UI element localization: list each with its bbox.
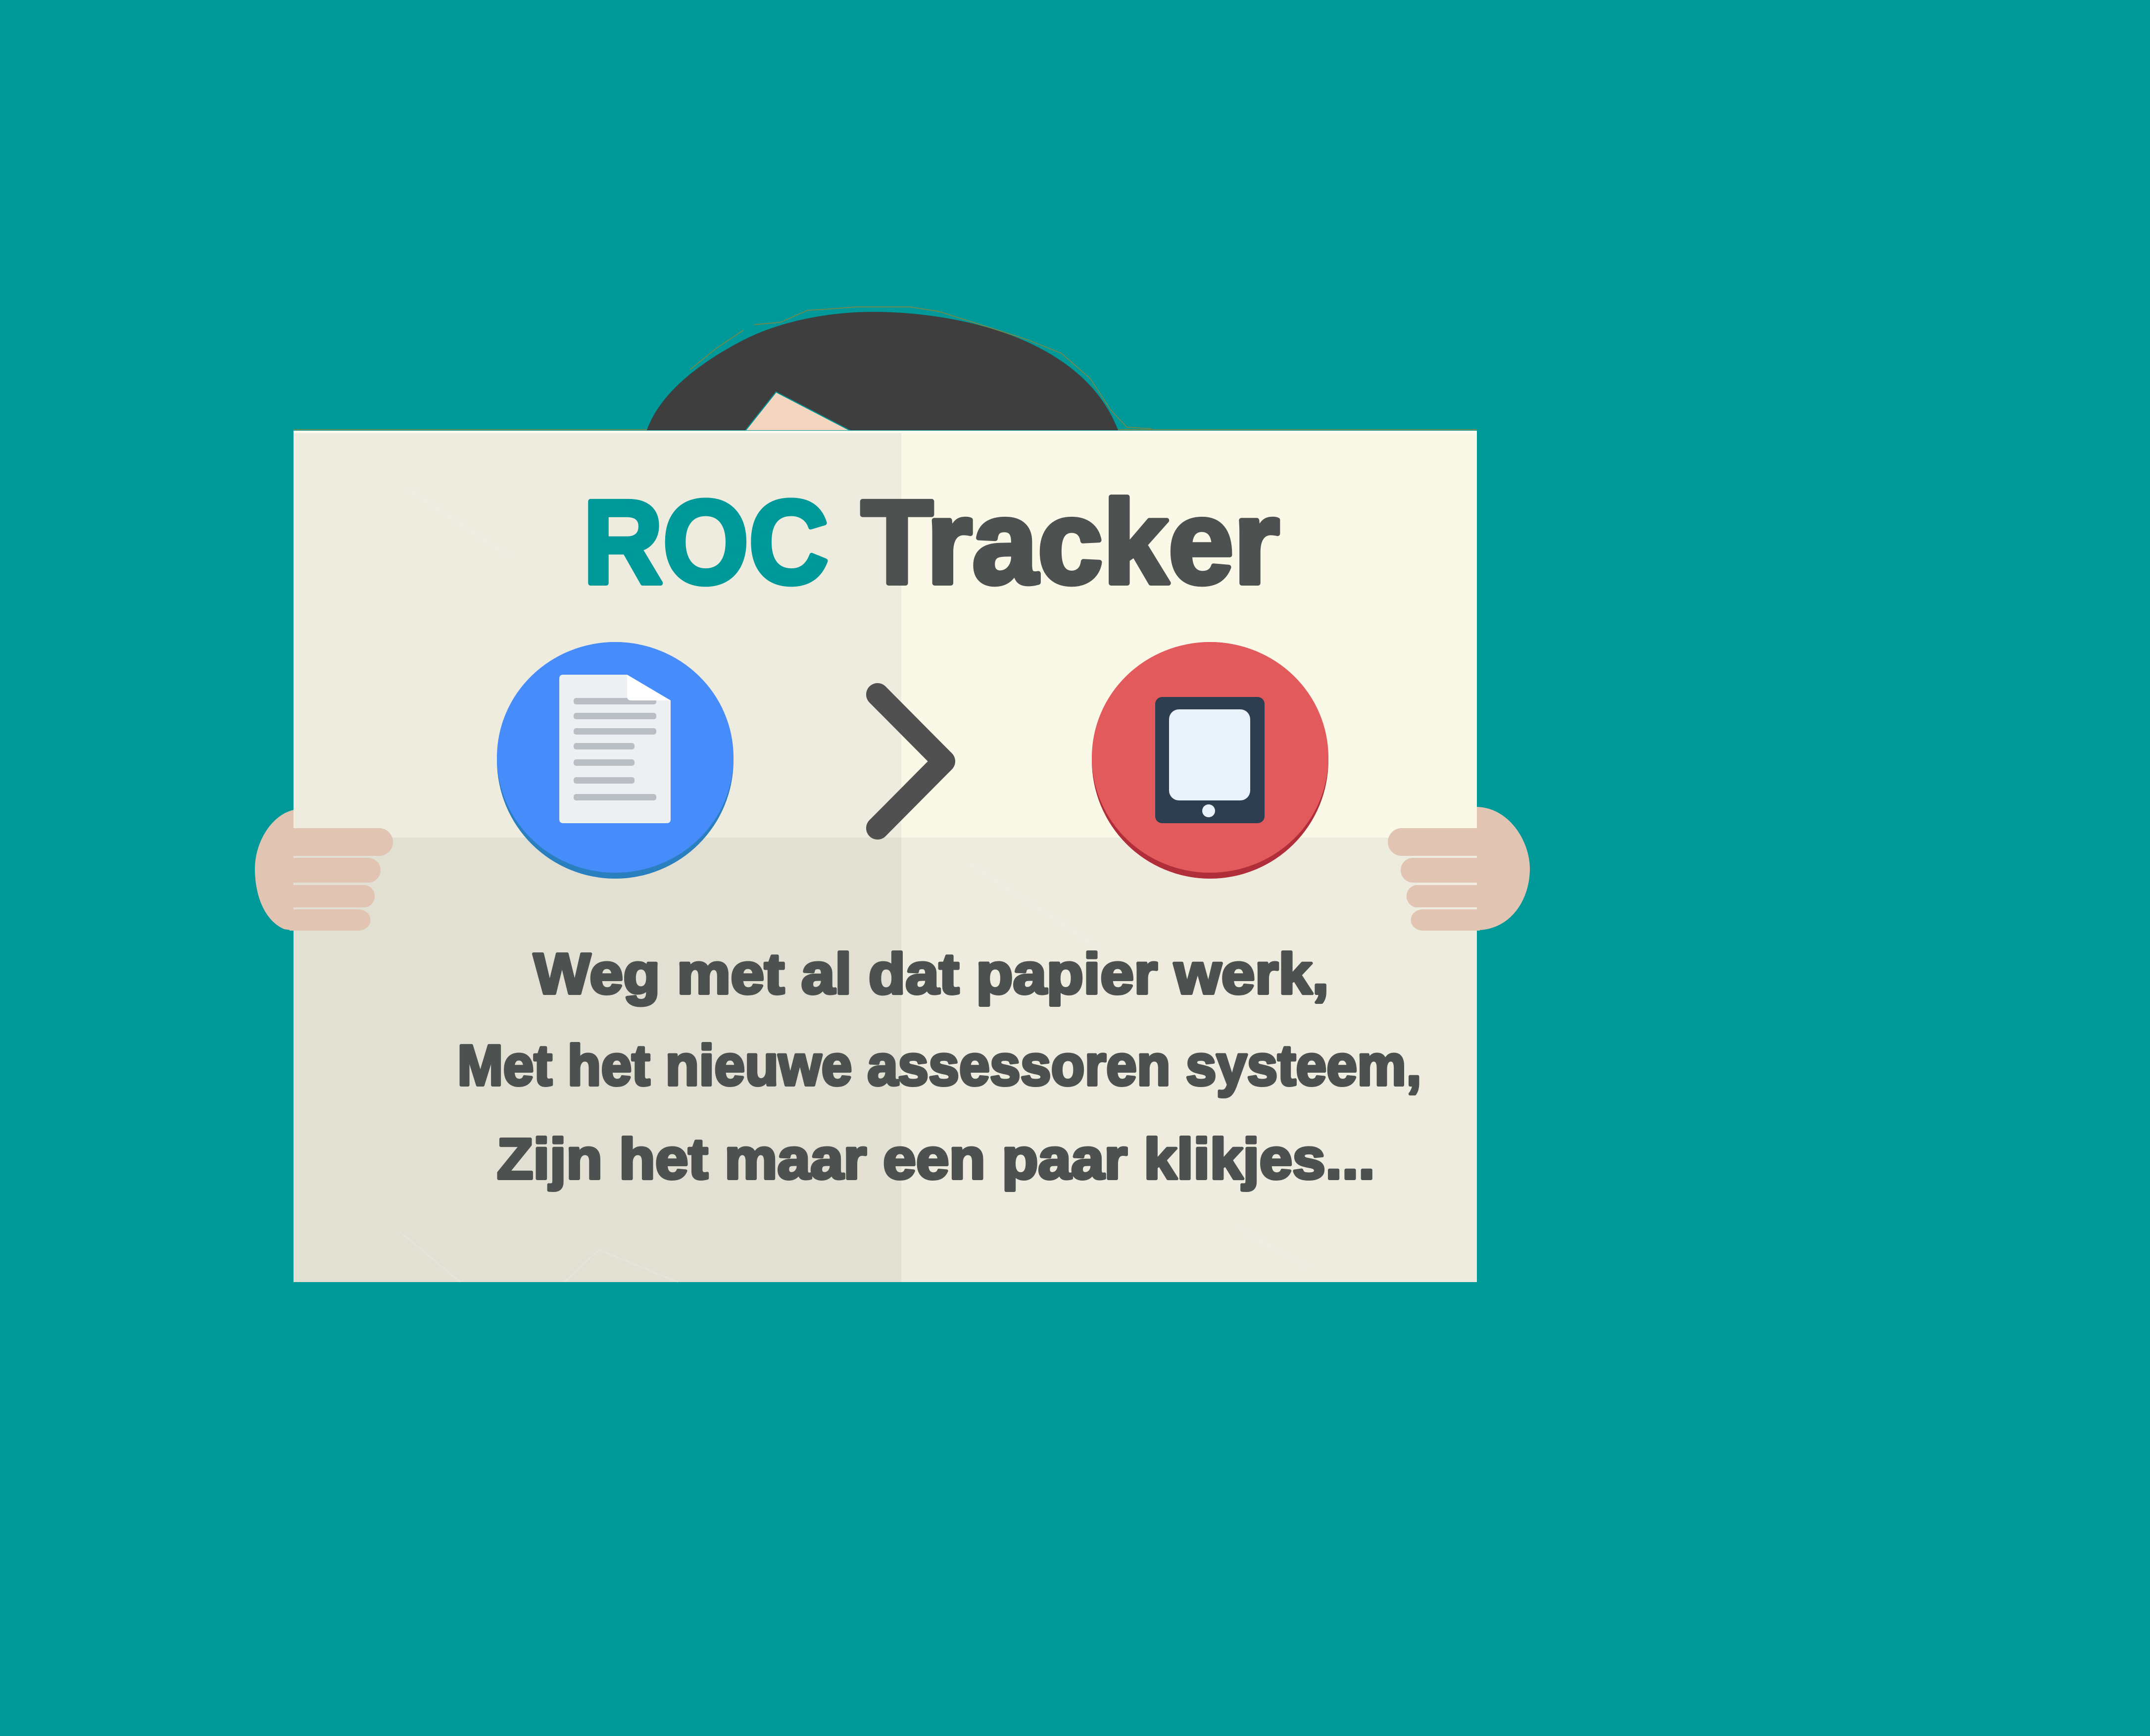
text block: message (457, 942, 1421, 1191)
illustration: person holding paper (255, 307, 1530, 931)
icon: paper document in blue circle (497, 642, 733, 879)
left hand palm (255, 810, 294, 931)
head: face (745, 392, 850, 431)
arrow: chevron (878, 694, 944, 828)
title: ROC Tracker: Tracker (861, 476, 1279, 608)
panel: paper sign (293, 431, 1477, 1282)
title: ROC Tracker: ROC (583, 476, 829, 608)
head: hair (293, 307, 1477, 430)
text block: message: Weg met al dat papier werk, (534, 942, 1329, 1006)
right hand palm (1477, 807, 1530, 930)
text block: message: Zijn het maar een paar klikjes... (497, 1127, 1375, 1191)
icon: tablet in red circle (1092, 642, 1328, 879)
right hand fingers (1388, 828, 1480, 931)
title: ROC Tracker (583, 476, 1279, 608)
left hand fingers (290, 828, 393, 931)
text block: message: Met het nieuwe assessoren systeem, (457, 1033, 1421, 1097)
